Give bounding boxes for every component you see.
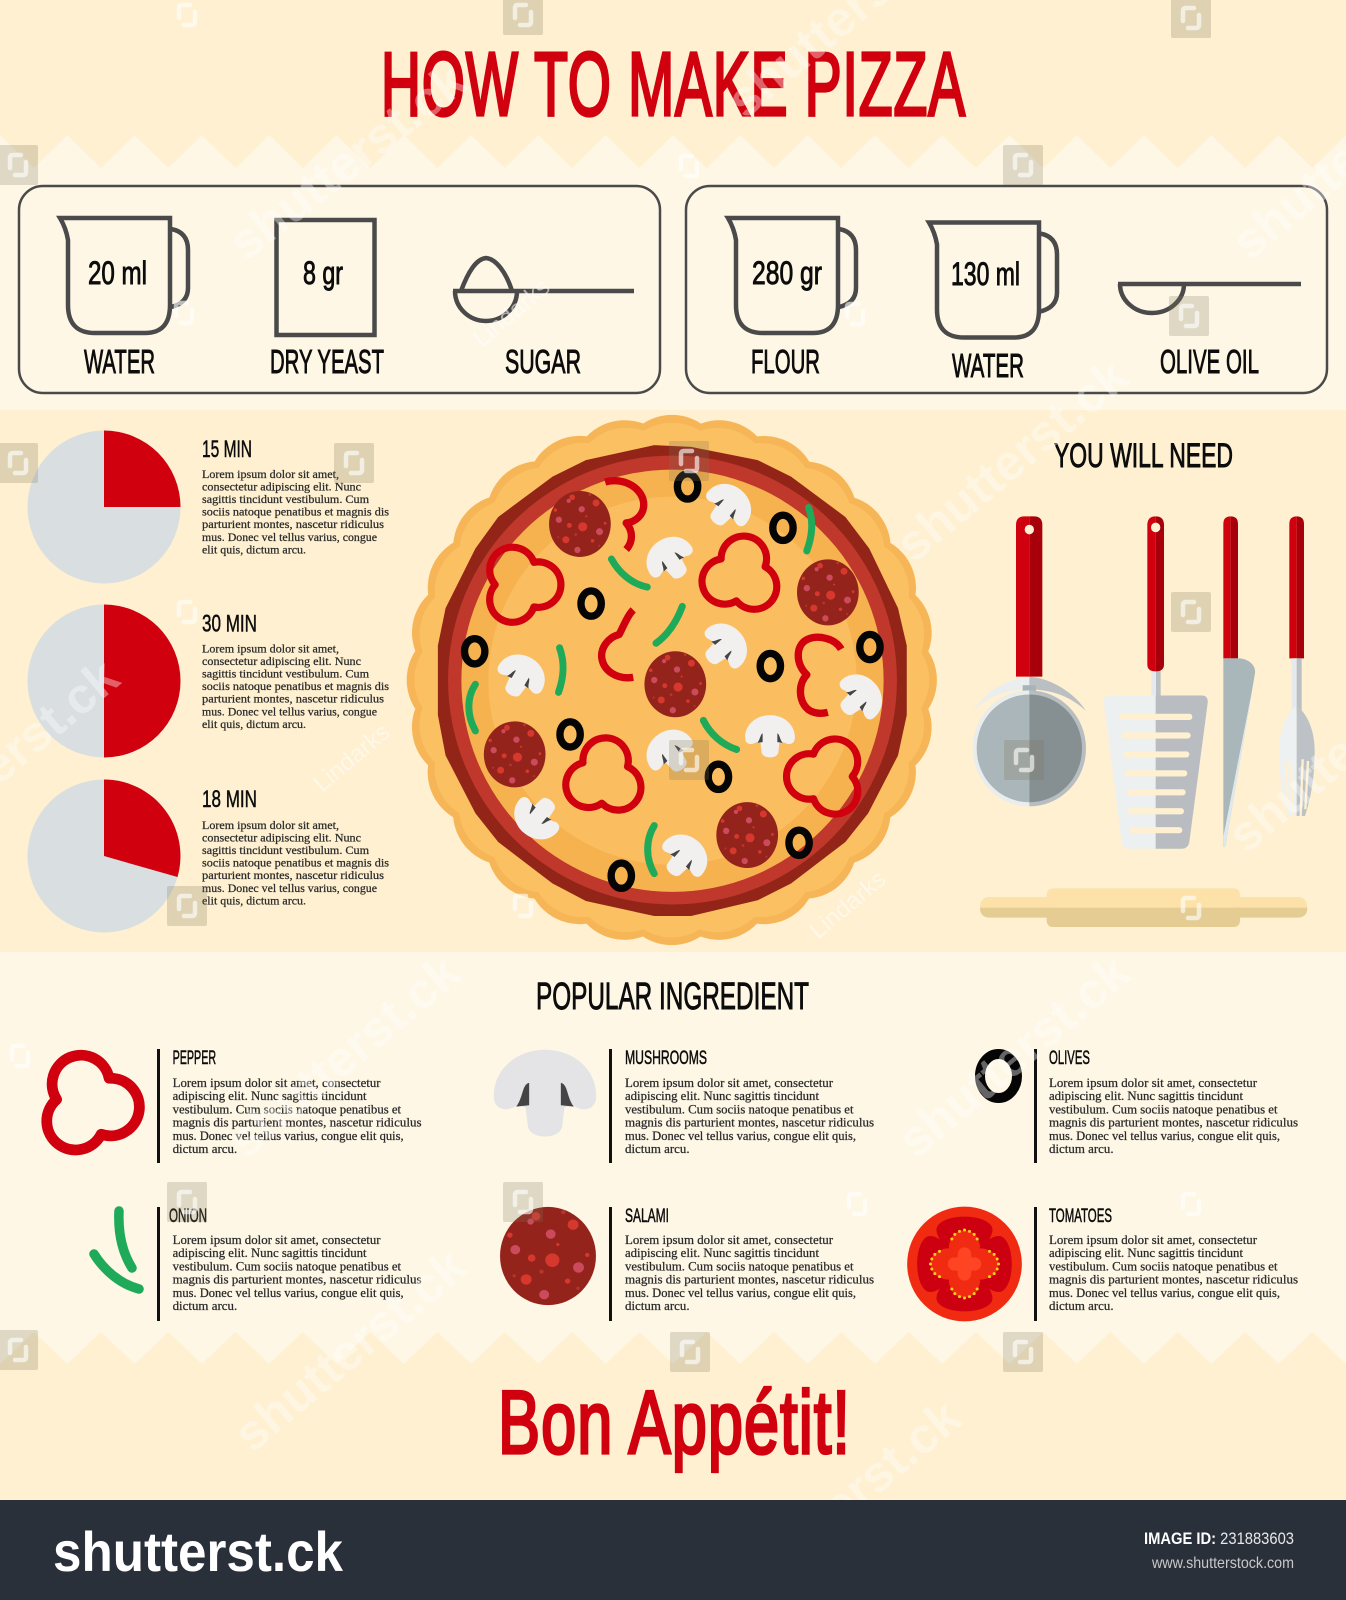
title olives: OLIVES xyxy=(1049,1048,1090,1069)
step text 15 min: consectetur adipiscing elit. Nunc xyxy=(202,480,361,494)
title tomatoes: TOMATOES xyxy=(1049,1206,1112,1227)
cheese xyxy=(461,470,884,892)
text salami: dictum arcu. xyxy=(625,1299,690,1313)
text salami: adipiscing elit. Nunc sagittis tincidunt xyxy=(625,1246,820,1260)
closing message: Bon Appétit! xyxy=(498,1372,851,1472)
step text 15 min: Lorem ipsum dolor sit amet, xyxy=(202,467,339,481)
text pepper: dictum arcu. xyxy=(173,1142,237,1156)
ingredient: onion xyxy=(94,1206,422,1321)
divider salami xyxy=(609,1207,612,1321)
step text 30 min: Lorem ipsum dolor sit amet, xyxy=(202,642,339,656)
title salami: SALAMI xyxy=(625,1206,669,1227)
step text 18 min: mus. Donec vel tellus varius, congue xyxy=(202,881,377,895)
step text 15 min: sagittis tincidunt vestibulum. Cum xyxy=(202,492,370,506)
icon: onion strips xyxy=(94,1211,139,1289)
text tomatoes xyxy=(1049,1233,1298,1313)
step text 30 min: mus. Donec vel tellus varius, congue xyxy=(202,704,377,718)
step text 15 min xyxy=(202,467,389,556)
text onion: Lorem ipsum dolor sit amet, consectetur xyxy=(173,1233,381,1247)
ingredient: pepper xyxy=(26,1039,422,1163)
text olives: Lorem ipsum dolor sit amet, consectetur xyxy=(1049,1076,1257,1090)
text olives: vestibulum. Cum sociis natoque penatibus et xyxy=(1049,1102,1278,1116)
step text 15 min: sociis natoque penatibus et magnis dis xyxy=(202,505,389,519)
text olives: adipiscing elit. Nunc sagittis tincidunt xyxy=(1049,1089,1244,1103)
label sugar: SUGAR xyxy=(505,343,581,380)
text salami: vestibulum. Cum sociis natoque penatibus et xyxy=(625,1259,854,1273)
step text 18 min: elit quis, dictum arcu. xyxy=(202,893,306,907)
sauce xyxy=(438,445,907,916)
label dry yeast: DRY YEAST xyxy=(270,343,384,380)
text tomatoes: Lorem ipsum dolor sit amet, consectetur xyxy=(1049,1233,1257,1247)
step text 15 min: mus. Donec vel tellus varius, congue xyxy=(202,530,377,544)
label olive oil: OLIVE OIL xyxy=(1160,343,1259,380)
panel: you will need xyxy=(973,437,1315,927)
step heading 30 min: 30 MIN xyxy=(202,610,257,638)
step text 18 min: sociis natoque penatibus et magnis dis xyxy=(202,856,389,870)
text onion: vestibulum. Cum sociis natoque penatibus et xyxy=(173,1259,402,1273)
water amount: 130 ml xyxy=(951,256,1020,292)
title pepper: PEPPER xyxy=(173,1048,216,1069)
text tomatoes: mus. Donec vel tellus varius, congue elit quis, xyxy=(1049,1286,1280,1300)
icon: fork xyxy=(1279,516,1315,816)
image id: IMAGE ID: 231883603 xyxy=(1144,1529,1294,1548)
salami slices xyxy=(484,491,859,868)
text pepper xyxy=(173,1076,422,1156)
step heading 18 min: 18 MIN xyxy=(202,786,257,813)
onion strips xyxy=(469,507,812,874)
divider tomatoes xyxy=(1034,1207,1037,1321)
text mushrooms: dictum arcu. xyxy=(625,1142,690,1156)
panel: pizza dough ingredients xyxy=(686,186,1327,393)
step heading 15 min: 15 MIN xyxy=(202,436,252,463)
title: HOW TO MAKE PIZZA xyxy=(381,35,966,135)
text olives: dictum arcu. xyxy=(1049,1142,1114,1156)
icon: yeast packet xyxy=(276,220,374,335)
panel: dough starter ingredients xyxy=(19,186,660,393)
step text 30 min: sagittis tincidunt vestibulum. Cum xyxy=(202,666,370,680)
stock watermarks: shutterst.ck xyxy=(217,943,470,1168)
text salami: Lorem ipsum dolor sit amet, consectetur xyxy=(625,1233,833,1247)
text pepper: magnis dis parturient montes, nascetur ridiculus xyxy=(173,1116,422,1130)
text olives xyxy=(1049,1076,1298,1156)
jug amount: 20 ml xyxy=(88,255,147,291)
icon: sugar spoon xyxy=(453,258,634,321)
ingredient: mushrooms xyxy=(494,1048,874,1163)
title onion: ONION xyxy=(169,1206,207,1227)
step text 30 min: consectetur adipiscing elit. Nunc xyxy=(202,654,361,668)
ingredient: tomatoes xyxy=(907,1206,1298,1321)
icon: rolling pin xyxy=(980,888,1307,927)
stock watermarks: shutterst.ck xyxy=(223,1237,476,1462)
text pepper: vestibulum. Cum sociis natoque penatibus et xyxy=(173,1102,402,1116)
ingredient: olives xyxy=(980,1048,1298,1163)
text tomatoes: dictum arcu. xyxy=(1049,1299,1114,1313)
step text 30 min: parturient montes, nascetur ridiculus xyxy=(202,692,384,706)
text pepper: mus. Donec vel tellus varius, congue elit quis, xyxy=(173,1129,404,1143)
text salami: magnis dis parturient montes, nascetur ridiculus xyxy=(625,1273,874,1287)
icon: knife xyxy=(1223,516,1255,847)
step text 18 min xyxy=(202,818,389,907)
text mushrooms: mus. Donec vel tellus varius, congue elit quis, xyxy=(625,1129,856,1143)
divider pepper xyxy=(157,1049,160,1163)
divider onion xyxy=(157,1207,160,1321)
tools illustrated xyxy=(973,516,1315,927)
icon: mushroom xyxy=(494,1050,596,1137)
step text 15 min: elit quis, dictum arcu. xyxy=(202,542,306,556)
text onion: adipiscing elit. Nunc sagittis tincidunt xyxy=(173,1246,367,1260)
pie chart 30 min xyxy=(28,604,180,758)
pizza crust xyxy=(459,468,884,893)
text onion xyxy=(173,1233,422,1313)
olives xyxy=(465,474,880,888)
stock watermarks: Lindarks xyxy=(805,866,891,945)
text mushrooms: adipiscing elit. Nunc sagittis tincidunt xyxy=(625,1089,820,1103)
text tomatoes: magnis dis parturient montes, nascetur ridiculus xyxy=(1049,1273,1298,1287)
step text 30 min xyxy=(202,642,389,731)
stock watermarks: Lindarks xyxy=(469,274,555,353)
icon: water jug two xyxy=(929,222,1057,338)
mushrooms xyxy=(489,474,892,889)
icon: pizza cutter xyxy=(973,516,1086,806)
step text 15 min: parturient montes, nascetur ridiculus xyxy=(202,517,384,531)
icon: flour jug xyxy=(728,218,856,333)
site url: www.shutterstock.com xyxy=(1151,1555,1294,1572)
divider olives xyxy=(1034,1049,1037,1163)
text onion: mus. Donec vel tellus varius, congue elit quis, xyxy=(173,1286,404,1300)
step text 18 min: consectetur adipiscing elit. Nunc xyxy=(202,830,361,844)
text mushrooms: magnis dis parturient montes, nascetur ridiculus xyxy=(625,1116,874,1130)
text olives: mus. Donec vel tellus varius, congue elit quis, xyxy=(1049,1129,1280,1143)
stock watermarks: shutterst.ck xyxy=(885,347,1138,572)
text salami: mus. Donec vel tellus varius, congue elit quis, xyxy=(625,1286,856,1300)
heading popular ingredient: POPULAR INGREDIENT xyxy=(536,976,809,1018)
icon: tomato slice xyxy=(907,1207,1022,1321)
label water two: WATER xyxy=(952,347,1024,384)
text pepper: Lorem ipsum dolor sit amet, consectetur xyxy=(173,1076,381,1090)
stock watermarks: shutterst.ck xyxy=(218,52,476,271)
footer logo: shutterst.ck xyxy=(53,1520,344,1583)
text mushrooms xyxy=(625,1076,874,1156)
pepper rings xyxy=(469,481,879,822)
step text 18 min: sagittis tincidunt vestibulum. Cum xyxy=(202,843,370,857)
stock watermarks: Lindarks xyxy=(309,719,395,798)
icon: water jug xyxy=(60,218,188,333)
divider mushrooms xyxy=(609,1049,612,1163)
text tomatoes: vestibulum. Cum sociis natoque penatibus et xyxy=(1049,1259,1278,1273)
icon: olive xyxy=(980,1054,1017,1098)
title mushrooms: MUSHROOMS xyxy=(625,1048,707,1069)
pie chart 15 min xyxy=(28,430,180,584)
icon: salami xyxy=(500,1207,596,1305)
icon: oil spoon xyxy=(1118,284,1301,313)
icon: spatula xyxy=(1104,516,1208,849)
heading you will need: YOU WILL NEED xyxy=(1054,437,1233,475)
text salami xyxy=(625,1233,874,1313)
label water: WATER xyxy=(84,343,155,380)
step text 18 min: Lorem ipsum dolor sit amet, xyxy=(202,818,339,832)
text onion: dictum arcu. xyxy=(173,1299,237,1313)
text onion: magnis dis parturient montes, nascetur ridiculus xyxy=(173,1273,422,1287)
icon: pepper ring xyxy=(26,1039,148,1159)
text tomatoes: adipiscing elit. Nunc sagittis tincidunt xyxy=(1049,1246,1244,1260)
panel: baking steps xyxy=(28,430,389,932)
flour amount: 280 gr xyxy=(752,255,822,291)
footer bar xyxy=(0,1500,1346,1600)
step text 30 min: sociis natoque penatibus et magnis dis xyxy=(202,679,389,693)
illustration: pizza xyxy=(438,445,907,916)
text olives: magnis dis parturient montes, nascetur ridiculus xyxy=(1049,1116,1298,1130)
label flour: FLOUR xyxy=(751,343,820,380)
text pepper: adipiscing elit. Nunc sagittis tincidunt xyxy=(173,1089,367,1103)
step text 18 min: parturient montes, nascetur ridiculus xyxy=(202,868,384,882)
step text 30 min: elit quis, dictum arcu. xyxy=(202,717,306,731)
stock watermarks: shutterst.ck xyxy=(887,943,1140,1168)
pie chart 18 min xyxy=(28,780,180,932)
text mushrooms: vestibulum. Cum sociis natoque penatibus et xyxy=(625,1102,854,1116)
text mushrooms: Lorem ipsum dolor sit amet, consectetur xyxy=(625,1076,833,1090)
ingredient: salami xyxy=(500,1206,874,1321)
yeast amount: 8 gr xyxy=(303,255,343,291)
